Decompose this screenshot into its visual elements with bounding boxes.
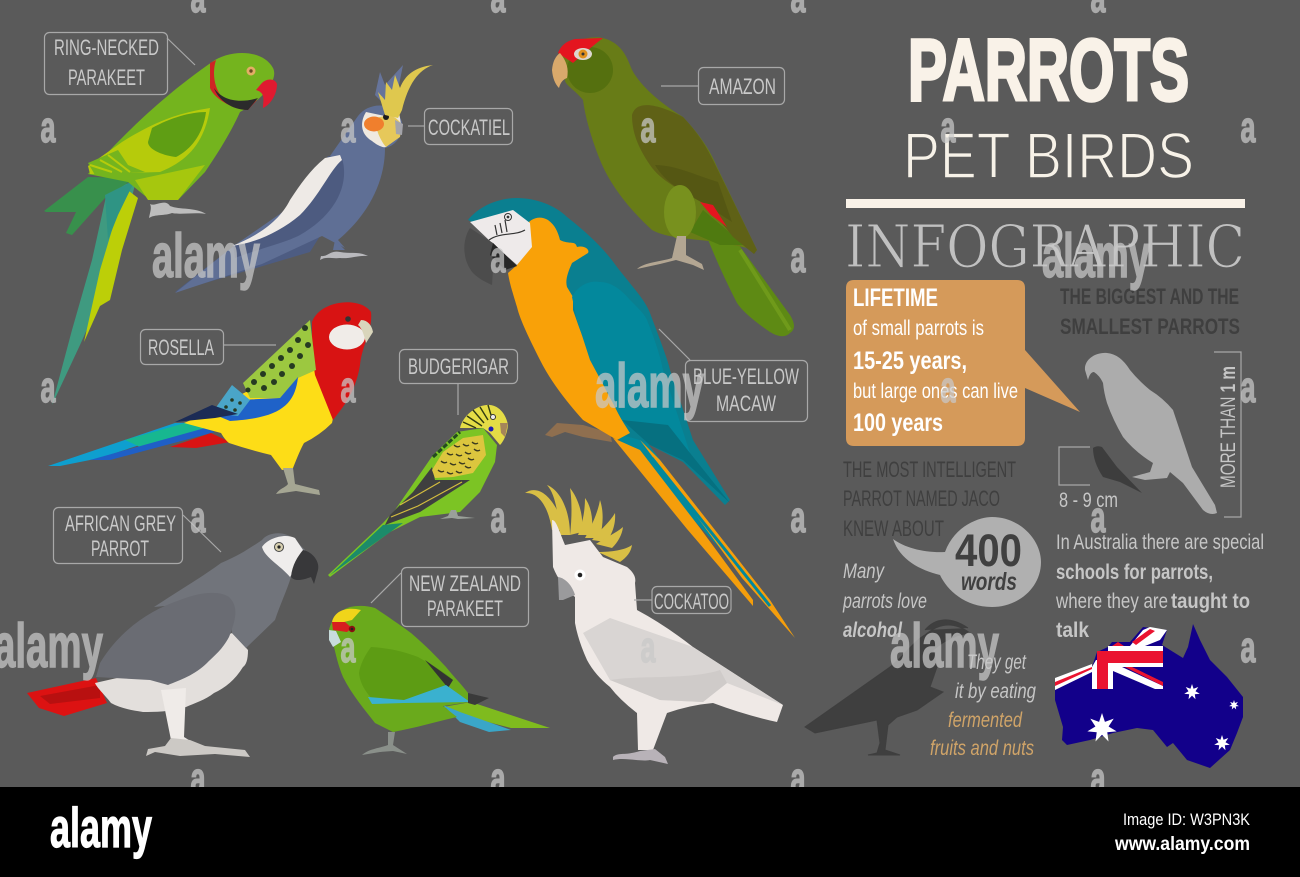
text: schools for parrots [1055, 531, 1264, 642]
text: they get it by eating: it by eating [955, 680, 1036, 703]
bird: rosella [48, 302, 373, 495]
watermarks: a [640, 103, 656, 152]
text: most intelligent parrot: PARROT NAMED JACO [843, 486, 1000, 511]
label: rosella: ROSELLA [148, 335, 214, 360]
watermarks: a [190, 754, 206, 803]
text: many parrots love alcohol: parrots love [842, 590, 927, 613]
watermarks: a [640, 623, 656, 672]
speech bubble: 400 words [893, 517, 1041, 607]
watermarks: a [40, 103, 56, 152]
watermarks: a [1090, 754, 1106, 803]
measure: 8-9 cm: 8 - 9 cm [1059, 489, 1118, 512]
text: schools for parrots: where they are [1055, 590, 1168, 613]
bird: new zealand parakeet [329, 606, 550, 755]
callout: lifetime: but large ones can live [853, 380, 1018, 403]
label: blue-yellow macaw [659, 329, 808, 422]
watermarks: a [1240, 623, 1256, 672]
bird: budgerigar [328, 405, 508, 577]
watermarks: a [490, 754, 506, 803]
watermarks: a [1240, 103, 1256, 152]
watermarks: alamy [152, 222, 260, 291]
watermarks: a [940, 363, 956, 412]
icon: drinking parrot silhouette [805, 620, 970, 755]
divider rule [846, 199, 1245, 208]
icon: small parrot silhouette [1093, 446, 1142, 493]
label: new zealand parakeet: NEW ZEALAND [409, 571, 521, 596]
text: most intelligent parrot [843, 457, 1016, 541]
watermarks: a [790, 754, 806, 803]
watermarks: a [340, 623, 356, 672]
text: many parrots love alcohol [842, 560, 927, 642]
text: schools for parrots: talk [1056, 619, 1089, 642]
measure: more than 1 m [1214, 352, 1241, 517]
label: african grey parrot: AFRICAN GREY [65, 511, 176, 536]
label: budgerigar: BUDGERIGAR [408, 354, 509, 379]
watermarks: a [490, 493, 506, 542]
heading: biggest and smallest [1060, 284, 1240, 339]
text: they get it by eating [930, 651, 1036, 760]
label: cockatiel [408, 108, 512, 144]
label: ring-necked parakeet: PARAKEET [68, 65, 145, 90]
callout: lifetime [846, 280, 1080, 446]
label: amazon [661, 68, 784, 104]
label: ring-necked parakeet: RING-NECKED [54, 35, 159, 60]
icon: big parrot silhouette [1085, 353, 1217, 514]
callout: lifetime: LIFETIME [853, 284, 938, 312]
label: new zealand parakeet: PARAKEET [427, 596, 503, 621]
bird: ring-necked parakeet [44, 53, 277, 405]
watermarks: a [790, 493, 806, 542]
watermarks: a [1240, 363, 1256, 412]
watermarks: a [340, 363, 356, 412]
text: many parrots love alcohol: alcohol [843, 619, 903, 642]
icon: australia flag map [1055, 624, 1243, 768]
watermarks: a [490, 233, 506, 282]
text: most intelligent parrot: KNEW ABOUT [843, 516, 944, 541]
watermarks: alamy [1042, 222, 1150, 291]
bird: cockatiel [175, 65, 433, 293]
label: african grey parrot [54, 508, 221, 564]
label: budgerigar [400, 350, 518, 415]
callout: lifetime: of small parrots is [853, 317, 984, 340]
watermarks: a [940, 103, 956, 152]
footer bar: www.alamy.com [1114, 834, 1250, 855]
footer bar [0, 787, 1300, 877]
text: they get it by eating: fermented [948, 709, 1023, 732]
label: cockatiel: COCKATIEL [428, 115, 510, 140]
text: they get it by eating: fruits and nuts [930, 737, 1034, 760]
label: blue-yellow macaw: MACAW [716, 391, 776, 416]
text: they get it by eating: They get [967, 651, 1027, 674]
watermarks: a [40, 363, 56, 412]
watermarks: a [1090, 493, 1106, 542]
bird: blue-yellow macaw [464, 198, 795, 638]
label: blue-yellow macaw: BLUE-YELLOW [693, 364, 799, 389]
label: amazon: AMAZON [709, 74, 776, 99]
watermarks: a [190, 493, 206, 542]
heading: biggest and smallest: SMALLEST PARROTS [1060, 314, 1240, 339]
label: african grey parrot: PARROT [91, 536, 149, 561]
watermarks: a [790, 233, 806, 282]
watermarks: a [340, 103, 356, 152]
callout: lifetime: 100 years [853, 409, 943, 437]
label: new zealand parakeet [371, 568, 528, 626]
footer bar: alamy [50, 796, 152, 859]
bird: amazon [552, 37, 794, 336]
text: many parrots love alcohol: Many [843, 560, 885, 583]
label: cockatoo [634, 586, 731, 614]
speech bubble: 400 words: words [961, 568, 1017, 596]
heading: infographic: INFOGRAPHIC [845, 212, 1245, 281]
watermarks: alamy [890, 612, 999, 681]
bird: african grey parrot [27, 533, 318, 757]
label: ring-necked parakeet [44, 32, 195, 94]
bird: cockatoo [525, 485, 783, 764]
label: cockatoo: COCKATOO [654, 589, 729, 614]
measure: 8-9 cm [1059, 447, 1118, 512]
text: schools for parrots: taught to [1171, 590, 1250, 613]
watermarks: alamy [595, 352, 704, 421]
text: most intelligent parrot: THE MOST INTELLIGENT [843, 457, 1016, 482]
label: rosella [140, 330, 276, 364]
subtitle: pet birds: PET BIRDS [903, 119, 1194, 192]
speech bubble: 400 words: 400 [955, 525, 1022, 576]
callout: lifetime: 15-25 years, [853, 347, 967, 375]
measure: more than 1 m: MORE THAN 1 m [1217, 366, 1240, 488]
text: schools for parrots: schools for parrots, [1056, 561, 1213, 584]
footer bar: Image ID: W3PN3K [1123, 810, 1251, 829]
